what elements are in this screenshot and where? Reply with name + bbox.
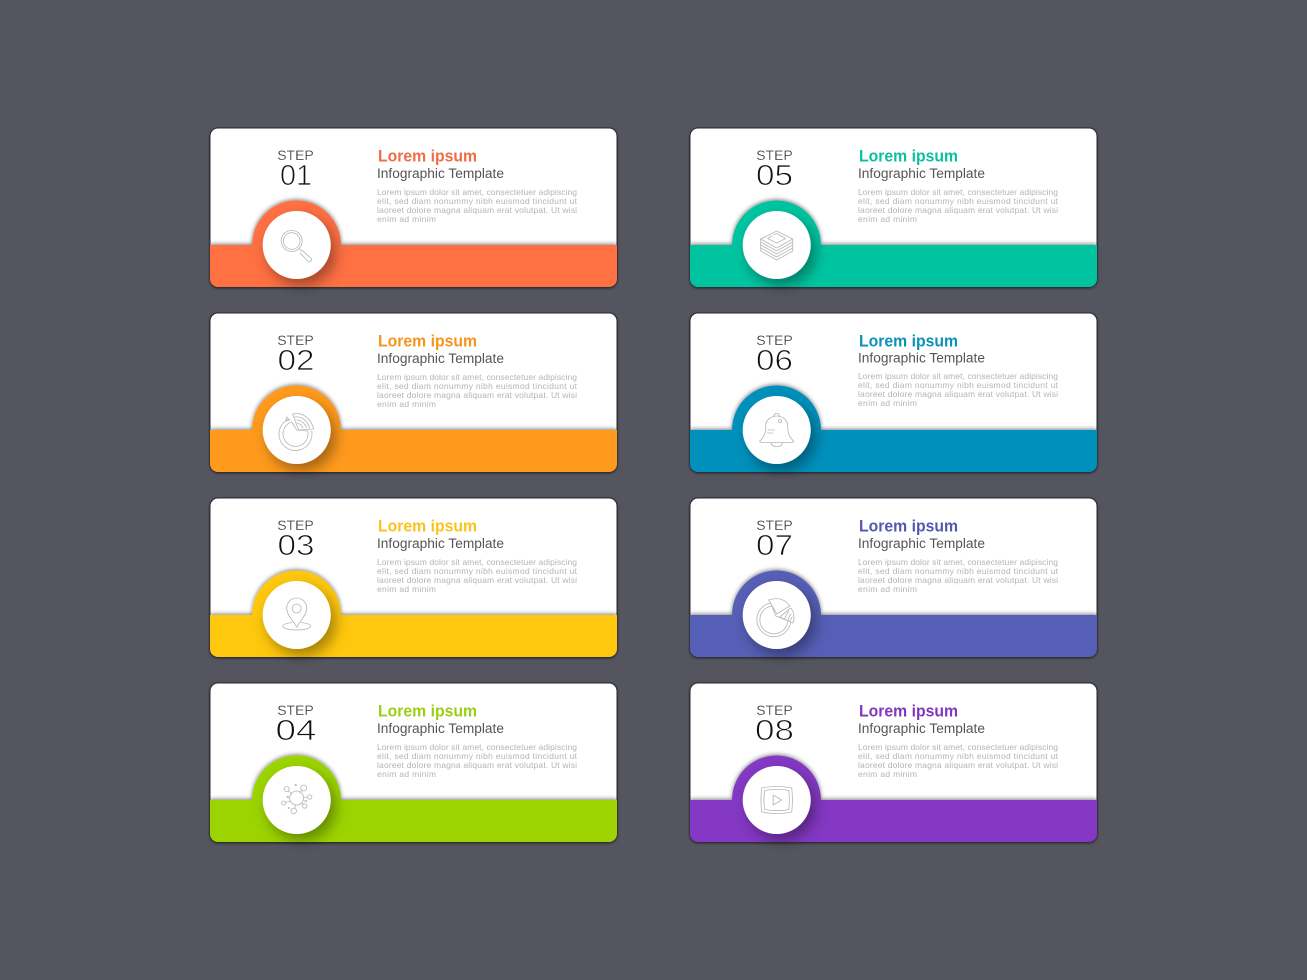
body text: elit, sed diam nonummy nibh euismod tincidunt ut xyxy=(858,380,1059,390)
body text: laoreet dolore magna aliquam erat volutpat. Ut wisi xyxy=(858,575,1058,585)
body text: Lorem ipsum dolor sit amet, consectetuer adipiscing xyxy=(858,742,1058,752)
body text: elit, sed diam nonummy nibh euismod tincidunt ut xyxy=(858,566,1059,576)
heading: Lorem ipsum xyxy=(378,146,477,166)
body text: elit, sed diam nonummy nibh euismod tincidunt ut xyxy=(377,196,578,206)
colour band with hump xyxy=(690,200,1097,287)
body text: enim ad minim xyxy=(858,214,917,224)
subheading: Infographic Template xyxy=(858,350,985,366)
icon: layers xyxy=(761,231,793,260)
body text: Lorem ipsum dolor sit amet, consectetuer adipiscing xyxy=(858,557,1058,567)
step label: STEP xyxy=(277,147,314,163)
card body xyxy=(690,128,1097,287)
subheading: Infographic Template xyxy=(377,721,504,736)
white icon circle xyxy=(743,581,811,649)
body text: enim ad minim xyxy=(377,769,436,779)
body text xyxy=(377,187,578,224)
step label: 08 xyxy=(755,715,794,747)
icon: map pin xyxy=(283,598,311,630)
card body xyxy=(690,313,1097,472)
body text xyxy=(377,372,578,409)
subheading: Infographic Template xyxy=(858,166,985,181)
step label xyxy=(277,332,314,377)
heading: Lorem ipsum xyxy=(859,702,958,720)
step label: STEP xyxy=(756,702,793,718)
body text xyxy=(858,557,1059,594)
colour band with hump xyxy=(210,570,617,657)
step label xyxy=(756,332,793,377)
body text: Lorem ipsum dolor sit amet, consectetuer adipiscing xyxy=(377,557,577,567)
subheading: Infographic Template xyxy=(377,536,504,551)
panel: step 07 xyxy=(690,498,1097,657)
step label: 01 xyxy=(280,160,312,192)
body text: enim ad minim xyxy=(858,584,917,594)
colour band with hump xyxy=(210,756,617,842)
icon: pie chart xyxy=(757,599,794,637)
icon: magnifier xyxy=(281,230,311,262)
white icon circle xyxy=(263,766,331,834)
step label: STEP xyxy=(277,702,314,718)
icon: bell xyxy=(760,413,794,447)
body text: Lorem ipsum dolor sit amet, consectetuer adipiscing xyxy=(377,742,577,752)
panel: step 04 xyxy=(210,683,617,842)
step label: 05 xyxy=(756,160,793,192)
icon: video screen xyxy=(761,786,792,814)
white icon circle xyxy=(263,581,331,649)
step label xyxy=(756,147,793,192)
step label xyxy=(277,147,314,192)
heading: Lorem ipsum xyxy=(378,702,477,720)
subheading: Infographic Template xyxy=(377,351,504,366)
step label: 02 xyxy=(278,345,314,377)
body text: Lorem ipsum dolor sit amet, consectetuer adipiscing xyxy=(858,371,1058,381)
step label: STEP xyxy=(277,332,314,348)
body text: laoreet dolore magna aliquam erat volutpat. Ut wisi xyxy=(377,390,577,400)
icon: network xyxy=(282,784,312,814)
body text: laoreet dolore magna aliquam erat volutpat. Ut wisi xyxy=(377,575,577,585)
white icon circle xyxy=(743,766,811,834)
step label: STEP xyxy=(756,332,793,348)
heading: Lorem ipsum xyxy=(859,146,958,166)
card body xyxy=(210,313,617,472)
panel: step 03 xyxy=(210,498,617,657)
subheading: Infographic Template xyxy=(858,721,985,736)
card body xyxy=(690,498,1097,657)
step label xyxy=(276,702,316,747)
panel: step 05 xyxy=(690,128,1097,287)
body text: laoreet dolore magna aliquam erat volutpat. Ut wisi xyxy=(377,205,577,215)
body text: enim ad minim xyxy=(377,214,436,224)
step label: STEP xyxy=(277,517,314,533)
card body xyxy=(210,498,617,657)
body text: elit, sed diam nonummy nibh euismod tincidunt ut xyxy=(377,381,578,391)
panel: step 08 xyxy=(690,683,1097,842)
colour band with hump xyxy=(690,570,1097,657)
body text: elit, sed diam nonummy nibh euismod tincidunt ut xyxy=(858,751,1059,761)
body text: laoreet dolore magna aliquam erat volutpat. Ut wisi xyxy=(377,760,577,770)
icon: radial chart xyxy=(279,414,314,451)
body text xyxy=(377,742,578,779)
step label: 03 xyxy=(278,530,314,562)
body text xyxy=(858,187,1059,224)
step label: 06 xyxy=(756,345,793,377)
step label: 04 xyxy=(276,715,316,747)
colour band with hump xyxy=(690,386,1097,472)
card body xyxy=(210,128,617,287)
colour band with hump xyxy=(210,386,617,472)
colour band with hump xyxy=(210,200,617,287)
panel: step 02 xyxy=(210,313,617,472)
white icon circle xyxy=(743,211,811,279)
heading: Lorem ipsum xyxy=(859,516,958,536)
body text xyxy=(377,557,578,594)
body text: enim ad minim xyxy=(377,399,436,409)
colour band with hump xyxy=(690,756,1097,842)
white icon circle xyxy=(743,396,811,464)
step label: 07 xyxy=(756,530,793,562)
step label: STEP xyxy=(756,517,793,533)
body text: laoreet dolore magna aliquam erat volutpat. Ut wisi xyxy=(858,760,1058,770)
step label: STEP xyxy=(756,147,793,163)
panel: step 01 xyxy=(210,128,617,287)
body text: elit, sed diam nonummy nibh euismod tincidunt ut xyxy=(377,751,578,761)
white icon circle xyxy=(263,396,331,464)
panel: step 06 xyxy=(690,313,1097,472)
card body xyxy=(690,683,1097,842)
body text: Lorem ipsum dolor sit amet, consectetuer adipiscing xyxy=(858,187,1058,197)
heading: Lorem ipsum xyxy=(378,516,477,536)
body text: Lorem ipsum dolor sit amet, consectetuer adipiscing xyxy=(377,372,577,382)
body text: laoreet dolore magna aliquam erat volutpat. Ut wisi xyxy=(858,205,1058,215)
body text xyxy=(858,371,1059,408)
body text: enim ad minim xyxy=(858,769,917,779)
body text: enim ad minim xyxy=(858,398,917,408)
card body xyxy=(210,683,617,842)
heading: Lorem ipsum xyxy=(378,332,477,350)
body text: laoreet dolore magna aliquam erat volutpat. Ut wisi xyxy=(858,389,1058,399)
body text: elit, sed diam nonummy nibh euismod tincidunt ut xyxy=(858,196,1059,206)
body text: enim ad minim xyxy=(377,584,436,594)
step label xyxy=(756,517,793,562)
body text: Lorem ipsum dolor sit amet, consectetuer adipiscing xyxy=(377,187,577,197)
body text: elit, sed diam nonummy nibh euismod tincidunt ut xyxy=(377,566,578,576)
subheading: Infographic Template xyxy=(858,536,985,551)
white icon circle xyxy=(263,211,331,279)
step label xyxy=(277,517,314,562)
step label xyxy=(755,702,794,747)
heading: Lorem ipsum xyxy=(859,332,958,350)
body text xyxy=(858,742,1059,779)
subheading: Infographic Template xyxy=(377,166,504,181)
